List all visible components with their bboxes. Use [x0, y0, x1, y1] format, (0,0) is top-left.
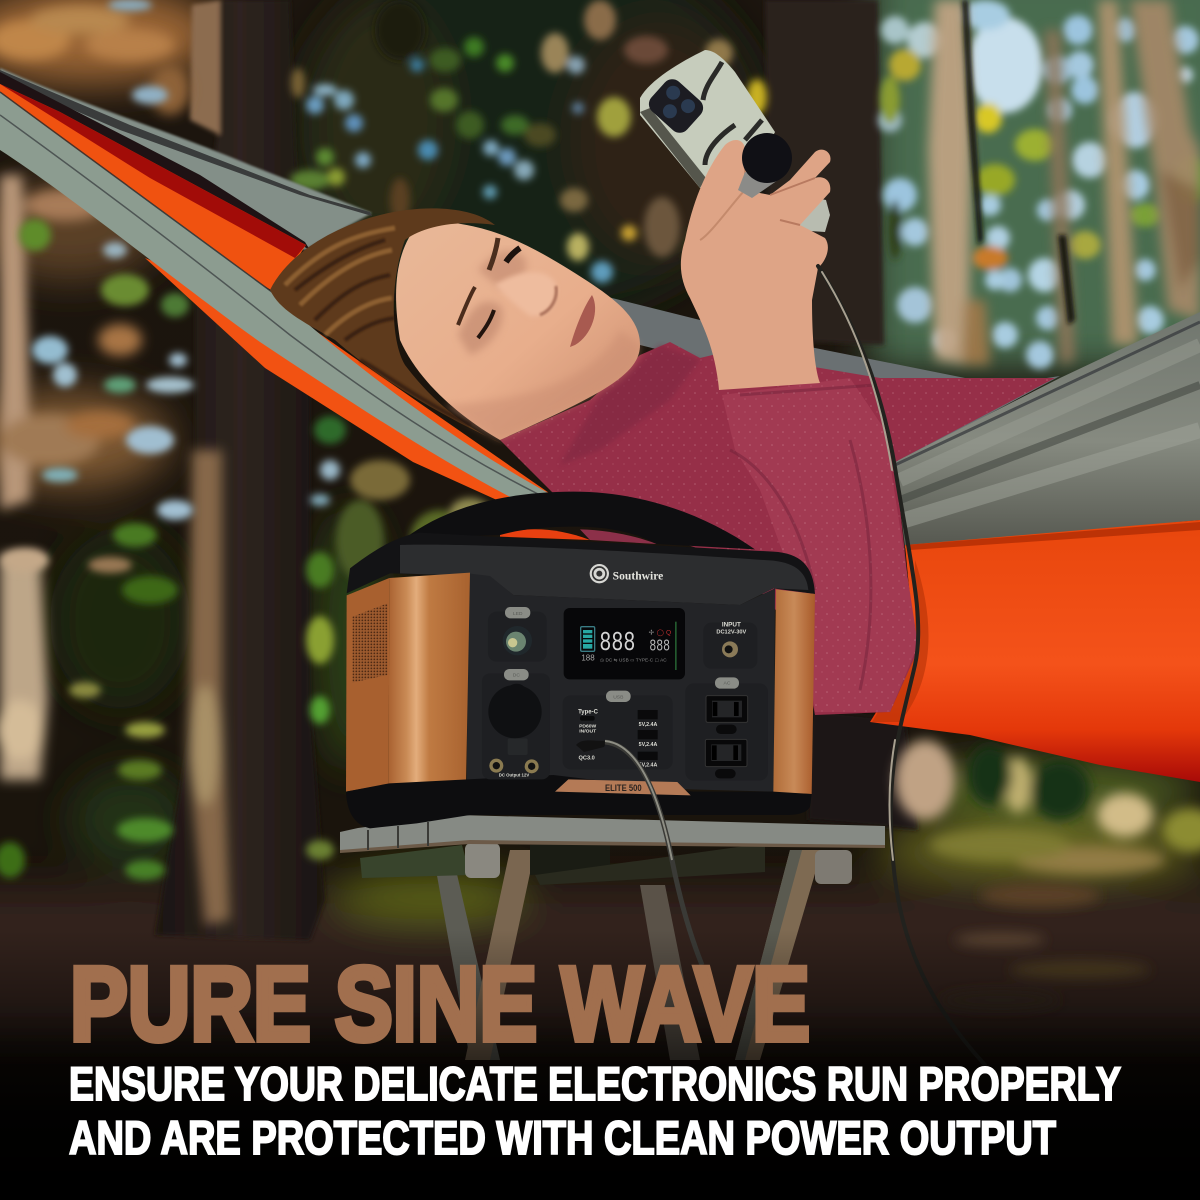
person lying in hammock	[270, 208, 1055, 715]
DC outlet with cover	[482, 669, 550, 779]
AC outlets	[685, 677, 768, 781]
DC input port: DC12V-30V	[716, 630, 746, 636]
LCD display: ✢	[649, 629, 655, 637]
table legs	[436, 870, 500, 1060]
speaker vent	[353, 603, 387, 683]
charging cable from device to phone	[818, 266, 985, 1065]
brand logo: Southwire	[613, 570, 663, 582]
camera module	[645, 75, 707, 137]
USB ports: 5V,2.4A	[639, 762, 658, 768]
sleeve fold shadows	[730, 385, 875, 690]
DC input port: INPUT	[722, 622, 741, 629]
USB ports: USB	[613, 694, 624, 700]
USB cable plugged into device	[576, 740, 702, 965]
LED button and lamp	[488, 607, 547, 662]
eye sockets	[478, 251, 526, 288]
front panel	[467, 573, 775, 792]
right copper	[773, 589, 815, 794]
hand holding phone	[681, 140, 831, 390]
hammock: left gray band with orange edge	[0, 92, 552, 506]
hair strands	[285, 228, 395, 335]
DC outlet with cover: DC	[513, 673, 520, 679]
LCD display: 888	[599, 629, 635, 659]
eyes and brows	[489, 238, 498, 270]
left copper front	[389, 573, 470, 784]
right side trunks	[928, 0, 1200, 365]
portable power station	[346, 492, 815, 828]
heading: pure sine wave: PURE SINE WAVE	[70, 946, 810, 1063]
USB ports: IN/OUT	[579, 728, 596, 734]
folding table	[340, 815, 885, 1060]
LCD display: 888	[649, 638, 670, 657]
left trunk and tan streaks	[155, 0, 918, 940]
LED button and lamp: LED	[513, 611, 523, 617]
face	[396, 222, 640, 440]
carry handle	[405, 492, 755, 549]
LCD display: ◷ DC ⇋ USB ▭ TYPE-C ▢ AC	[600, 657, 667, 662]
hammock: back fabric and inner orange on left	[0, 68, 1060, 462]
USB ports: QC3.0	[578, 756, 595, 762]
left speckles	[108, 0, 152, 11]
neck shadow	[560, 345, 700, 465]
USB ports	[563, 691, 673, 769]
centre speckles	[410, 58, 424, 72]
DC outlet with cover: DC Output 12V	[499, 773, 529, 778]
DC input port	[703, 622, 757, 669]
hammock: right gray and orange fabric	[870, 312, 1200, 782]
table top	[340, 815, 885, 852]
pop grip	[738, 133, 792, 198]
chin shadow	[445, 330, 640, 440]
top shell	[347, 533, 815, 605]
smartphone with marble case	[640, 50, 830, 232]
under brace	[360, 845, 470, 878]
LCD display	[564, 608, 685, 679]
USB ports: 5V,2.4A	[639, 722, 658, 728]
LCD display: 188	[581, 654, 595, 663]
sky	[967, 17, 1043, 113]
leaves right	[974, 103, 1002, 133]
sleeve	[722, 378, 918, 712]
left copper side	[346, 578, 389, 792]
bottom dark gradient	[0, 930, 1200, 1200]
nose	[495, 272, 556, 316]
USB ports: PD60W	[579, 723, 597, 729]
USB ports: 5V,2.4A	[639, 742, 658, 748]
model badge: ELITE 500	[605, 783, 642, 793]
lips	[570, 295, 595, 347]
shirt	[500, 342, 1055, 715]
shirt texture	[500, 342, 1055, 715]
bokeh speckles	[0, 0, 1200, 880]
hair	[270, 208, 505, 445]
lower end of phone	[795, 195, 830, 232]
orange fabric visible through handle	[500, 529, 590, 540]
USB ports: Type-C	[578, 709, 599, 715]
brand logo	[590, 564, 663, 583]
model badge	[555, 779, 691, 795]
bottom shell	[346, 775, 812, 828]
LCD display: ◯ Q	[657, 629, 671, 637]
AC outlets: AC	[724, 681, 731, 687]
